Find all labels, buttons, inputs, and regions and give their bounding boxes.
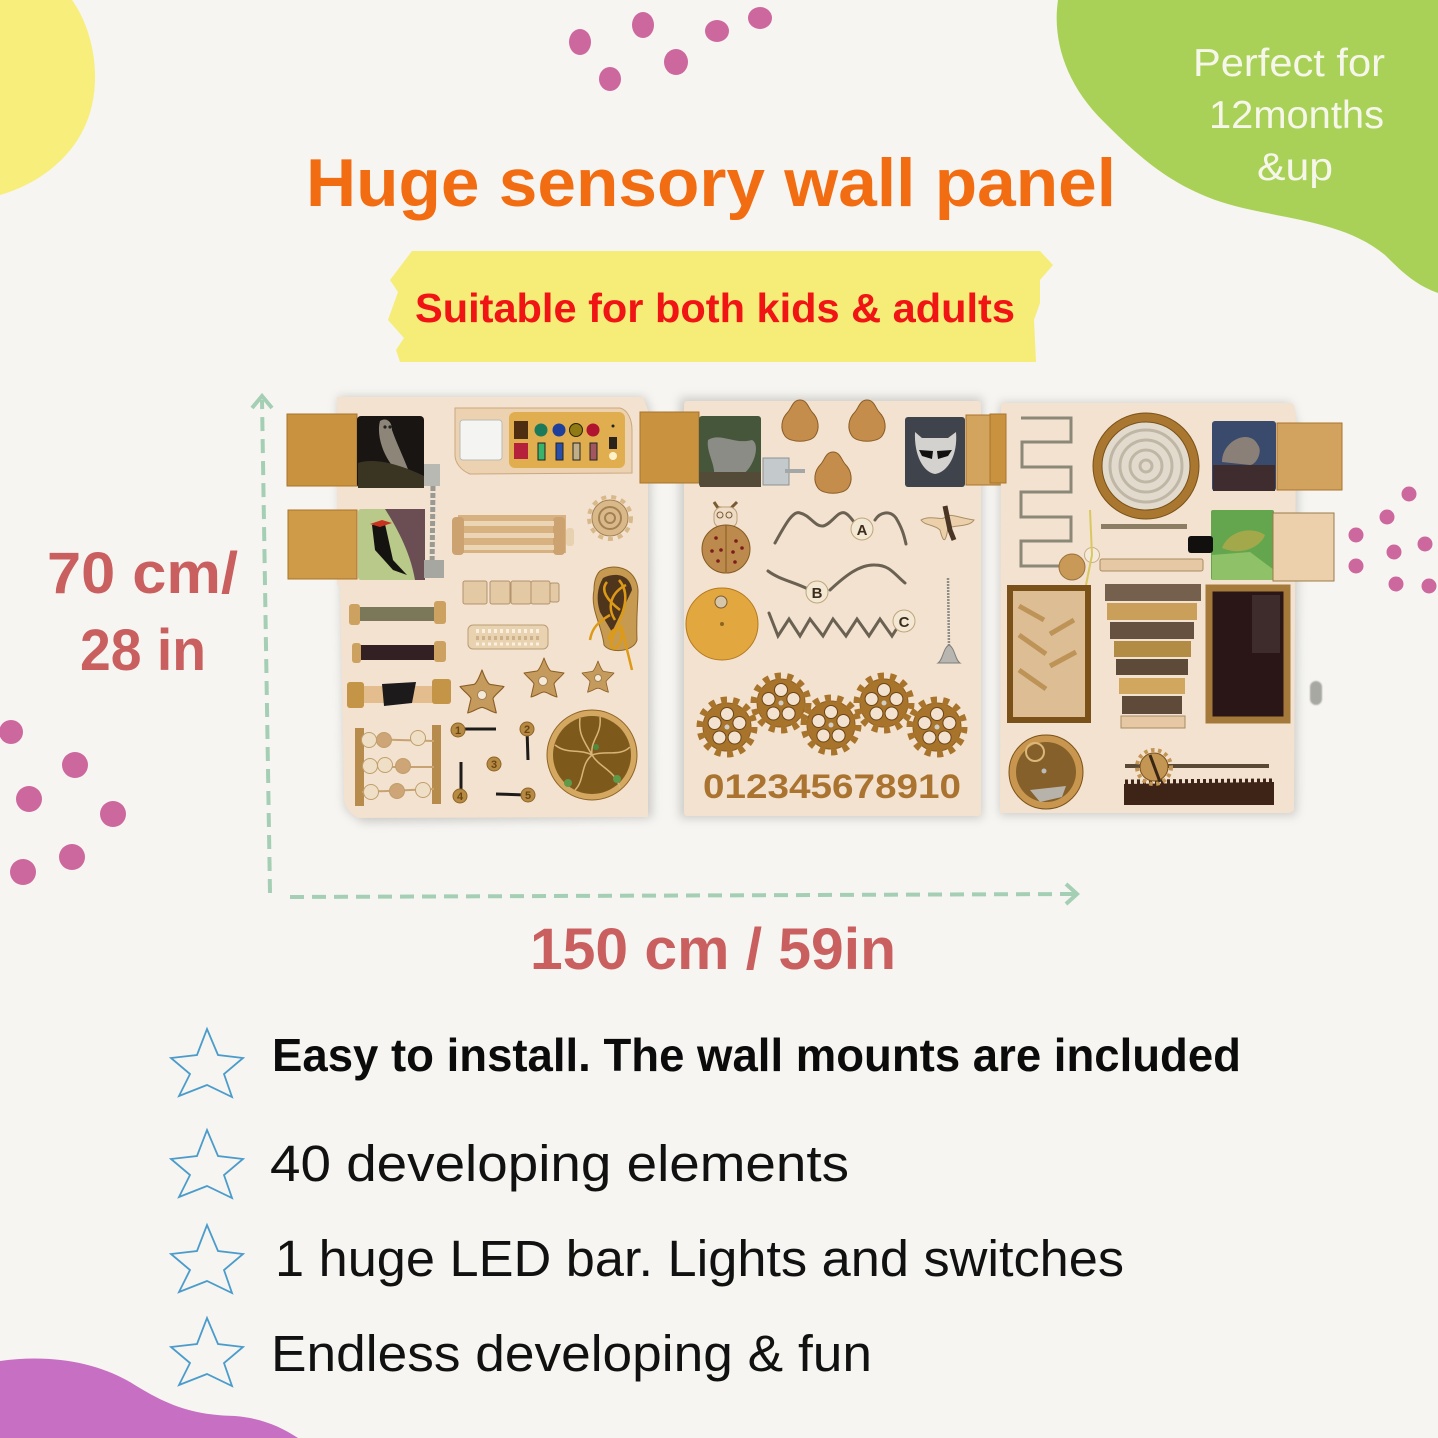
- dimension label: width: 150 cm / 59in: [530, 917, 896, 982]
- banner: yellow tape with subtitle: Suitable for both kids & adults: [415, 285, 1015, 331]
- slot and knob: [1059, 510, 1187, 635]
- photo: hedgehog: [1212, 421, 1276, 491]
- abacus: [355, 725, 441, 806]
- panel: right activity board: [990, 403, 1342, 815]
- callout: perfect for 12 months and up: 12months: [1209, 94, 1384, 137]
- picture cubes: [463, 581, 559, 604]
- numbered clips: 2: [524, 724, 530, 736]
- slider knobs: B: [812, 585, 823, 602]
- number row 0-10: 012345678910: [703, 768, 961, 806]
- flap: second left: [288, 510, 357, 579]
- blob: purple bottom left: [0, 1359, 298, 1438]
- feature: easy to install: Easy to install. The wall mounts are included: [272, 1029, 1241, 1081]
- photo: squirrel: [699, 416, 761, 487]
- panel: left activity board: [287, 397, 652, 822]
- flap: hedgehog: [1277, 423, 1342, 490]
- wooden pear flaps: [782, 400, 885, 493]
- arrow: horizontal width: [290, 884, 1077, 904]
- icon: star: [171, 1318, 243, 1386]
- blob: green top right: [1057, 0, 1438, 293]
- rack slider and gear: [1124, 750, 1274, 805]
- flap: middle left: [640, 412, 699, 483]
- round labyrinth: [1093, 413, 1199, 519]
- feature: endless fun: Endless developing & fun: [271, 1325, 872, 1382]
- cage roller: [452, 515, 574, 555]
- dimension label: height: [47, 541, 238, 683]
- flap: top left: [287, 414, 357, 486]
- right framed dark window: [1209, 588, 1287, 720]
- numbered clips: 1: [455, 725, 461, 737]
- dimension label: height: 28 in: [80, 618, 206, 683]
- tracks A B C: [768, 513, 906, 636]
- slider knobs: A: [857, 522, 868, 539]
- buckle strap: [347, 679, 451, 708]
- ladybug: [702, 502, 750, 573]
- photo: owl: [357, 416, 424, 488]
- round star shaker: [1009, 735, 1083, 809]
- callout: perfect for 12 months and up: Perfect for: [1193, 42, 1385, 85]
- grey mark: [1310, 681, 1322, 705]
- strap dark: [352, 641, 446, 663]
- LED control bar: [455, 408, 632, 474]
- orange spinning disk: [686, 588, 758, 660]
- dimension label: height: 70 cm/: [47, 541, 238, 606]
- small spiral gear: [589, 497, 631, 539]
- plane toy: [921, 506, 974, 540]
- strap olive: [349, 601, 446, 625]
- dots: left pink: [0, 720, 126, 885]
- wooden star knobs: [460, 658, 614, 713]
- callout: perfect for 12 months and up: &up: [1257, 146, 1333, 189]
- panel: middle activity board: [640, 398, 1005, 818]
- massage roller: [468, 625, 548, 649]
- black latch: [1188, 536, 1213, 553]
- slider knobs: C: [899, 614, 910, 631]
- lacing shoe: [590, 567, 638, 670]
- icon: star: [171, 1130, 243, 1198]
- numbered clips: 4: [457, 791, 464, 803]
- flap: right board left: [990, 414, 1006, 483]
- feature: endless fun: [171, 1318, 872, 1386]
- gears row: [700, 676, 964, 754]
- icon: star: [171, 1225, 243, 1293]
- feature: 40 developing elements: 40 developing elements: [270, 1135, 849, 1192]
- numbered clips: [451, 722, 535, 803]
- metal latch: [763, 458, 805, 485]
- arrow: vertical height: [252, 396, 272, 893]
- chain and latch: [424, 464, 444, 578]
- numbered clips: 3: [491, 759, 497, 771]
- slider knobs: [806, 518, 915, 632]
- bell on spring: [938, 578, 960, 663]
- board: [1000, 403, 1296, 813]
- photo: frog: [1211, 510, 1274, 580]
- icon: star: [171, 1029, 243, 1097]
- dots: right pink: [1348, 486, 1436, 594]
- flap: frog light: [1273, 513, 1334, 581]
- dots: top pink: [569, 7, 772, 91]
- title: Huge sensory wall panel: [306, 145, 1116, 221]
- feature: LED bar: 1 huge LED bar. Lights and switches: [275, 1230, 1124, 1287]
- maze groove: [1021, 418, 1071, 566]
- board: [337, 397, 648, 818]
- blob: yellow top left: [0, 0, 95, 195]
- callout: perfect for 12 months and up: [1193, 42, 1385, 189]
- photo: raccoon: [905, 417, 965, 487]
- flap: middle right: [966, 415, 1005, 485]
- board: [684, 401, 981, 816]
- numbered clips: 5: [525, 790, 531, 802]
- left framed chute: [1010, 588, 1088, 720]
- banner: yellow tape with subtitle: [388, 251, 1053, 362]
- wooden stair blocks: [1100, 559, 1203, 728]
- photo: woodpecker: [358, 509, 425, 580]
- feature: 40 developing elements: [171, 1130, 849, 1198]
- round puzzle wheel: [547, 710, 637, 800]
- feature: easy to install: [171, 1029, 1241, 1097]
